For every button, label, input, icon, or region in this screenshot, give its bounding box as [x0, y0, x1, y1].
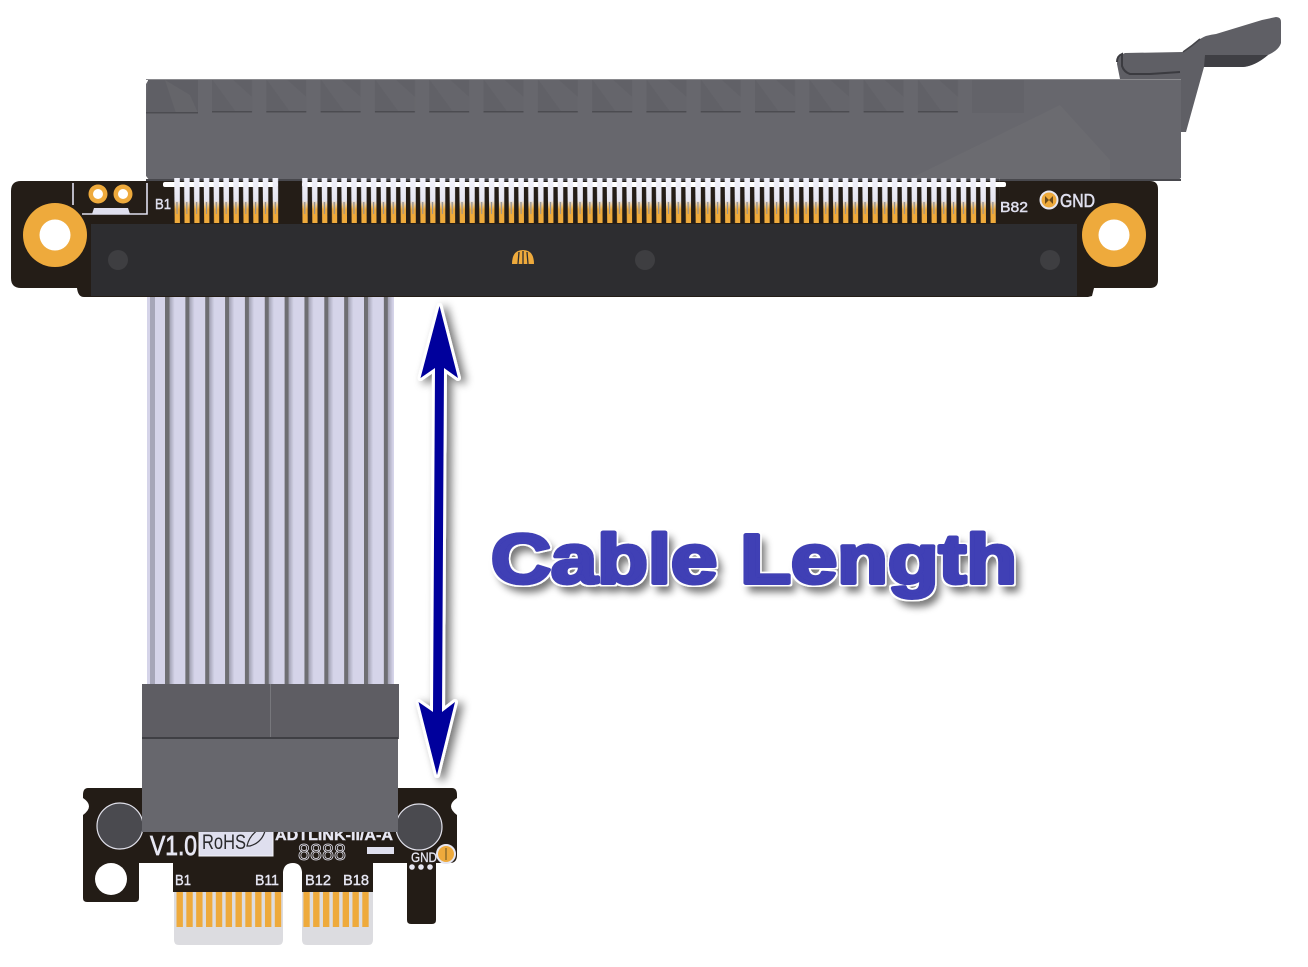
icon: GND pad: [1040, 192, 1058, 208]
white solder strip: [163, 182, 1006, 187]
latch: [1117, 17, 1281, 132]
cable: grey ribbon strips: [147, 297, 394, 685]
mounting hole: right: [1082, 203, 1146, 267]
mounting knob: left: [97, 803, 143, 849]
gold contacts: main row: [302, 178, 1000, 224]
gold contacts: B1 to B11: [174, 178, 282, 224]
labels: finger markers: B1: [175, 872, 191, 889]
labels: finger markers: [175, 872, 369, 889]
bottom connector: ribbon clamp: [142, 684, 399, 739]
first notch cell: [146, 80, 198, 113]
label: B1: B1: [155, 196, 171, 213]
ADTLINK brand: ADTLINK-II/A-A: [275, 827, 393, 844]
RoHS label: RoHS: [202, 831, 246, 854]
top connector: slot housing and latch: [146, 17, 1281, 181]
icon: GND pad small: [437, 845, 455, 863]
mounting knob: right: [396, 804, 442, 850]
three test dots: [409, 864, 433, 870]
top PCB board: [11, 181, 1158, 297]
black connector base: [91, 224, 1077, 296]
RoHS label: [199, 826, 273, 856]
arrow: cable length dimension: [418, 306, 458, 775]
icon: gold half-circle mark: [512, 250, 534, 264]
last notch cell: [972, 79, 1024, 113]
serial digits: 8888: [298, 839, 346, 865]
notch cells: [212, 79, 972, 114]
white silkscreen bar: [367, 847, 394, 854]
mounting hole: bottom left: [95, 863, 127, 895]
label: GND: GND: [1060, 191, 1095, 211]
silkscreen bracket and pads: [73, 183, 147, 214]
edge fingers: gold x1 contacts B1 to B11: [176, 892, 282, 927]
heading: Cable Length: Cable Length: [491, 520, 1017, 598]
edge fingers: gold x1 contacts B12 to B18: [303, 892, 369, 927]
labels: finger markers: B18: [343, 872, 369, 889]
label: GND small: GND: [411, 849, 437, 865]
housing body: [146, 79, 1181, 181]
edge fingers: blank substrate: [174, 892, 373, 945]
bottom PCB board: [83, 788, 457, 924]
bottom connector: plug body: [142, 737, 398, 832]
mounting hole: left: [23, 203, 87, 267]
labels: finger markers: B12: [305, 872, 331, 889]
labels: finger markers: B11: [255, 872, 279, 889]
label: B82: B82: [1000, 199, 1028, 216]
version label: V1.0: [150, 830, 197, 861]
